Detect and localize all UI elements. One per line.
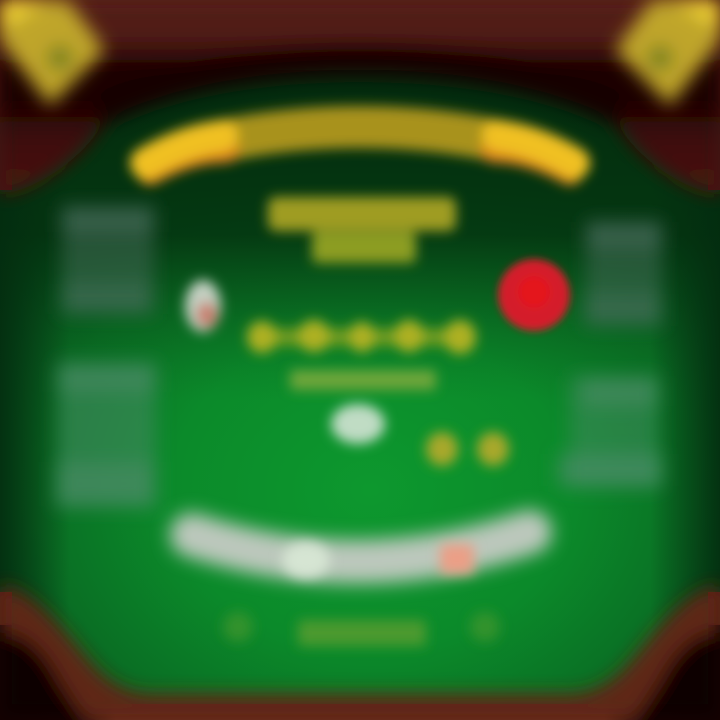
top padded rail bbox=[0, 0, 720, 195]
right text block lower bbox=[558, 376, 662, 488]
highlight on strip bbox=[282, 542, 330, 578]
headline bbox=[268, 197, 456, 263]
title banner bbox=[146, 127, 574, 172]
row of yellow number markers bbox=[247, 320, 476, 354]
top left badge bbox=[0, 0, 105, 106]
right text block upper bbox=[584, 222, 662, 326]
top right badge bbox=[615, 0, 720, 106]
icon: white dice chip bbox=[185, 280, 221, 332]
footer text bbox=[223, 612, 500, 646]
pair of yellow markers bbox=[426, 432, 509, 466]
left text block upper bbox=[62, 206, 154, 314]
curved white betting strip bbox=[192, 532, 530, 578]
left text block lower bbox=[56, 362, 156, 507]
center white marker bbox=[331, 404, 385, 444]
subtitle line bbox=[290, 370, 436, 390]
icon: red chip bbox=[498, 259, 570, 331]
salmon tile on strip bbox=[440, 544, 474, 574]
bottom padded rim bbox=[0, 585, 720, 720]
